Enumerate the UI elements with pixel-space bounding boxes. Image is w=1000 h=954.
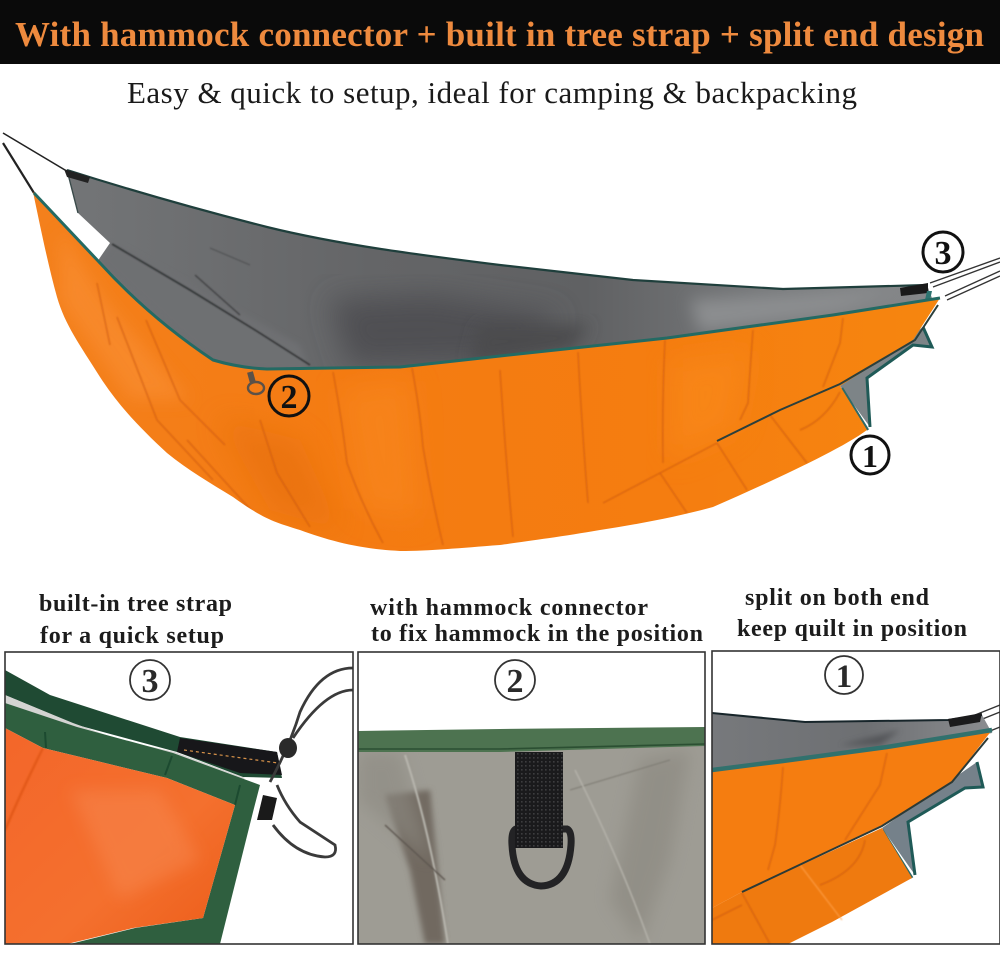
webbing strap	[515, 752, 563, 848]
caption: split on both end	[737, 585, 967, 642]
title text: With hammock connector + built in tree strap + split end design	[15, 15, 984, 54]
callout number 2: 2	[280, 379, 298, 416]
front edge binding	[34, 193, 940, 369]
inner grey lining	[64, 169, 932, 374]
caption: hammock connector	[370, 595, 703, 647]
grey fabric	[358, 742, 705, 944]
teal binding	[712, 730, 992, 770]
panel: tree strap detail	[5, 652, 353, 944]
callout number 1	[851, 436, 889, 474]
circled 1: 1	[836, 659, 852, 695]
caption: built-in tree strap: for a quick setup	[40, 623, 224, 649]
grey lining	[712, 714, 992, 768]
caption: built-in tree strap: built-in tree strap	[39, 591, 232, 617]
panel: hammock connector detail	[358, 652, 705, 944]
teal flap	[882, 762, 983, 875]
orange quilted panel	[5, 728, 235, 944]
caption: hammock connector: to fix hammock in the position	[371, 621, 703, 647]
suspension lines left	[3, 133, 65, 193]
caption: split on both end: split on both end	[745, 585, 930, 611]
panel: split end detail	[712, 651, 1000, 944]
black webbing strap	[177, 738, 282, 775]
straps	[975, 705, 1000, 731]
circled 1	[825, 656, 863, 695]
caption: split on both end: keep quilt in position	[737, 616, 967, 642]
rear green binding	[5, 670, 282, 778]
circled 3: 3	[142, 663, 158, 700]
callout number 3: 3	[934, 235, 952, 272]
circled 2: 2	[506, 663, 524, 700]
lower teal flap	[840, 327, 932, 430]
callout number 1: 1	[862, 438, 878, 474]
subtitle: Easy & quick to setup, ideal for camping & backpacking	[127, 75, 857, 110]
caption: built-in tree strap	[39, 591, 232, 649]
front green binding	[5, 703, 260, 944]
orange outer shell	[33, 192, 940, 551]
strap tab top left	[64, 169, 90, 183]
upper orange panel	[712, 730, 992, 908]
green binding band	[358, 727, 705, 752]
bungee cords	[270, 668, 353, 857]
cord knot	[279, 738, 297, 758]
main hammock underquilt illustration	[3, 133, 1000, 551]
D-ring	[512, 829, 571, 886]
circled 3	[130, 660, 170, 700]
callout number 2	[269, 376, 309, 416]
circled 2	[495, 660, 535, 700]
split line	[742, 738, 988, 892]
suspension lines right	[930, 258, 1000, 300]
strap tab top right	[900, 283, 928, 296]
split opening	[717, 305, 938, 441]
title banner	[0, 0, 1000, 64]
small strap end	[257, 795, 277, 820]
callout number 3	[923, 232, 963, 272]
top edge binding	[67, 170, 927, 289]
quilt seams	[97, 283, 843, 545]
hammock connector loop	[248, 372, 264, 394]
lower orange flap	[712, 828, 912, 944]
seams	[712, 753, 887, 944]
silver lining strip	[5, 695, 245, 782]
caption: hammock connector: with hammock connector	[370, 595, 648, 621]
